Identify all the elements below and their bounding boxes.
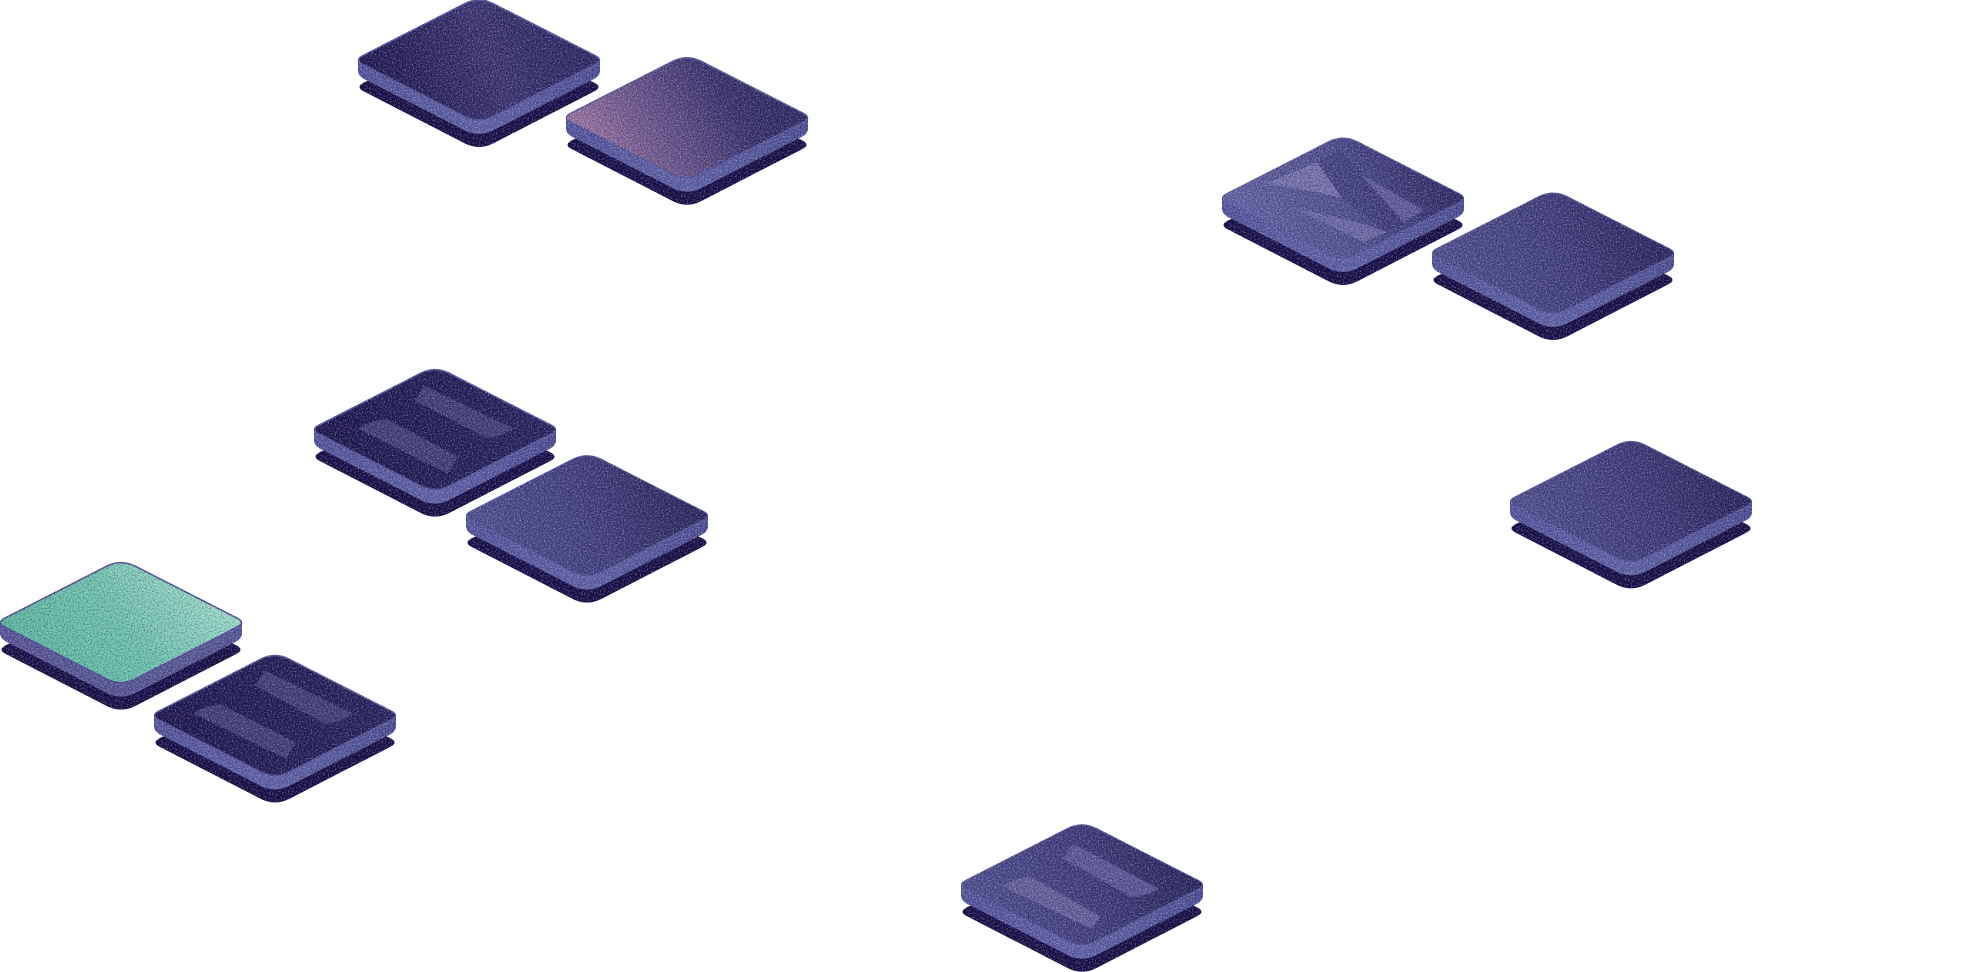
bar lower [358,420,458,474]
bar lower [1003,877,1101,929]
M stroke right [1360,174,1424,222]
side edge [1432,252,1674,327]
side edge [1222,197,1464,272]
side edge [314,429,556,504]
top face [0,563,242,683]
top face [962,825,1202,945]
shadow [360,34,598,147]
shadow [316,404,554,517]
top face [1432,193,1674,313]
tile: pink glow [566,58,808,205]
shadow [2,597,240,710]
tile: dark with two bars, bottom left [154,656,396,802]
top face [566,58,808,178]
tile: plain centre left [466,456,708,603]
M stroke left [1265,162,1342,198]
top face [466,456,708,576]
shadow [962,859,1202,972]
side edge [466,515,708,590]
M stroke bottom [1295,209,1387,242]
M dark band [1317,150,1404,232]
tile: dark indigo top left [358,0,600,147]
shadow [1224,172,1462,285]
top face [1510,441,1752,561]
bar upper [415,386,514,438]
tile: plain right lower [1510,441,1752,588]
top face [314,370,556,490]
shadow [1512,475,1750,588]
top face [1222,138,1464,258]
bar upper [1063,844,1159,897]
tile: dark with two bars, centre left [314,370,556,517]
bar lower [193,704,296,758]
side edge [961,884,1203,959]
shadow [1434,227,1672,340]
side edge [358,59,600,134]
tile: two light bars, bottom centre [961,825,1203,972]
top face [358,0,600,120]
tile: green highlighted [0,563,242,710]
side edge [154,714,396,790]
tile: M pattern [1222,138,1464,285]
bar upper [255,670,353,724]
side edge [1510,500,1752,575]
top face [154,656,396,776]
shadow [156,690,394,802]
tile: plain right upper [1432,193,1674,340]
shadow [568,92,806,205]
shadow [468,490,706,603]
side edge [566,117,808,192]
side edge [0,622,242,697]
